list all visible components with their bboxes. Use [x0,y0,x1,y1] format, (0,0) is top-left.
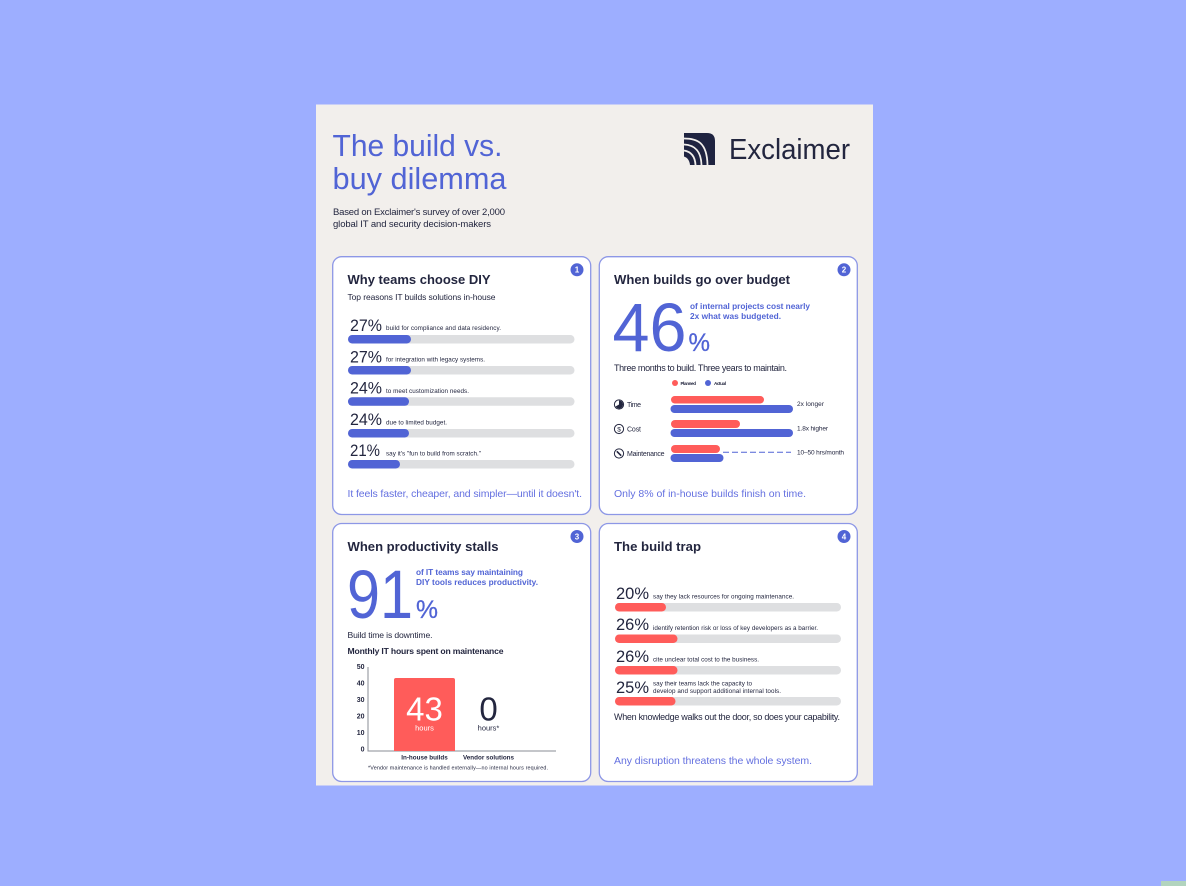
logo: Exclaimer [684,133,850,166]
badge 2 [838,263,850,276]
stat 46%: % [688,329,710,357]
legend [672,380,726,386]
stat 91%: 91 [347,556,413,633]
row 20%: 20% [616,585,649,603]
bar chart: monthly hours: 0 [361,746,365,754]
row 24% customization: to meet customization needs. [386,388,469,395]
row 24% customization [348,380,574,406]
bar chart: monthly hours [357,664,556,762]
row: maintenance [614,445,844,462]
heading: Why teams choose DIY [348,272,491,287]
row 26% retention: 26% [616,616,649,634]
row: cost: 1.8x higher [797,426,829,432]
subtitle: global IT and security decision-makers [333,219,491,230]
panel 3: when productivity stalls [333,524,591,782]
row 27% compliance: build for compliance and data residency. [386,325,501,332]
row 24% customization: 24% [350,380,382,398]
row 21% fun [348,442,574,468]
row: time: 2x longer [797,401,825,408]
heading: When builds go over budget [614,272,791,287]
badge 4: 4 [842,532,847,541]
stat 46%: of internal projects cost nearly [690,301,810,311]
row 25% capacity: 25% [616,679,649,697]
bar chart: monthly hours: 20 [357,714,365,720]
footnote: *Vendor maintenance is handled externally—no internal hours required. [368,766,548,772]
badge 3 [570,530,584,543]
subtitle: Based on Exclaimer's survey of over 2,000 [333,207,505,218]
row 27% compliance [348,317,574,344]
row 24% budget: due to limited budget. [386,420,447,426]
row 24% budget: 24% [350,411,382,429]
bar: in-house: hours [415,724,434,732]
row 25% capacity [615,679,841,706]
stat 46%: 46 [612,289,686,366]
bar chart: monthly hours: 40 [357,680,365,688]
text: knowledge: When knowledge walks out the door, so does your capability. [614,712,840,722]
row 20%: say they lack resources for ongoing maintenance. [653,594,794,600]
row: maintenance: Maintenance [627,451,665,458]
chart heading: Monthly IT hours spent on maintenance [348,646,504,656]
bar chart: monthly hours: In-house builds [401,754,448,762]
row 25% capacity: develop and support additional internal tools. [653,688,781,695]
stat 91%: % [416,596,438,624]
bar chart: monthly hours: 10 [357,730,365,737]
bar: in-house: 43 [406,690,443,728]
page sheet [316,104,873,786]
panel 2: when builds go over budget [599,257,857,514]
bar chart: planned vs actual [614,396,844,462]
stat 91%: of IT teams say maintaining [416,567,523,577]
takeaway: Any disruption threatens the whole system. [614,755,812,767]
row 20% [615,585,841,612]
title: The build vs. [332,128,502,163]
row: cost [614,420,829,437]
panel 1: why teams choose DIY [333,257,591,514]
takeaway: Only 8% of in-house builds finish on time. [614,488,806,500]
text: three months: Three months to build. Three years to maintain. [614,363,787,373]
row: time [614,396,825,413]
row 27% integration: 27% [350,348,382,366]
row 21% fun: say it's "fun to build from scratch." [386,451,481,458]
row 26% cost [615,648,841,674]
bar: in-house [394,678,455,751]
legend: Planned [680,381,696,386]
intro text: Top reasons IT builds solutions in-house [348,292,496,302]
row 26% retention [615,616,841,643]
bar chart: monthly hours: 30 [357,697,365,704]
value: vendor: 0 [479,690,498,728]
panel 4: the build trap [599,524,857,782]
badge 1: 1 [575,266,580,275]
stat 91%: DIY tools reduces productivity. [416,577,538,587]
value: vendor: hours* [478,724,499,732]
legend: Actual [714,381,726,386]
row 26% retention: identify retention risk or loss of key developers as a barrier. [653,625,818,632]
badge 1 [570,263,584,276]
row 25% capacity: say their teams lack the capacity to [653,680,752,688]
row: maintenance: 10–50 hrs/month [797,450,844,456]
text: build time: Build time is downtime. [348,630,432,640]
row 26% cost: cite unclear total cost to the business. [653,656,759,664]
stat 91% [347,556,538,633]
row 27% integration: for integration with legacy systems. [386,356,485,364]
badge 3: 3 [575,532,580,541]
bar chart: monthly hours: 50 [357,664,365,671]
row 26% cost: 26% [616,648,649,666]
stat 46% [612,289,810,366]
heading: The build trap [614,539,701,554]
badge 4 [838,530,850,543]
takeaway: It feels faster, cheaper, and simpler—until it doesn't. [348,488,582,500]
subtitle [333,207,505,230]
heading: When productivity stalls [348,539,498,554]
bar chart: monthly hours: Vendor solutions [463,754,515,762]
badge 2: 2 [842,266,847,275]
row 27% integration [348,348,574,374]
row 24% budget [348,411,574,438]
row: cost: Cost [627,426,641,434]
title: buy dilemma [332,161,507,196]
row: cost: $ [617,426,621,434]
row 27% compliance: 27% [350,317,382,335]
row: time: Time [627,402,641,409]
row 21% fun: 21% [350,442,380,460]
stat 46%: 2x what was budgeted. [690,311,781,321]
title [332,128,507,196]
logo: Exclaimer: Exclaimer [729,134,850,166]
